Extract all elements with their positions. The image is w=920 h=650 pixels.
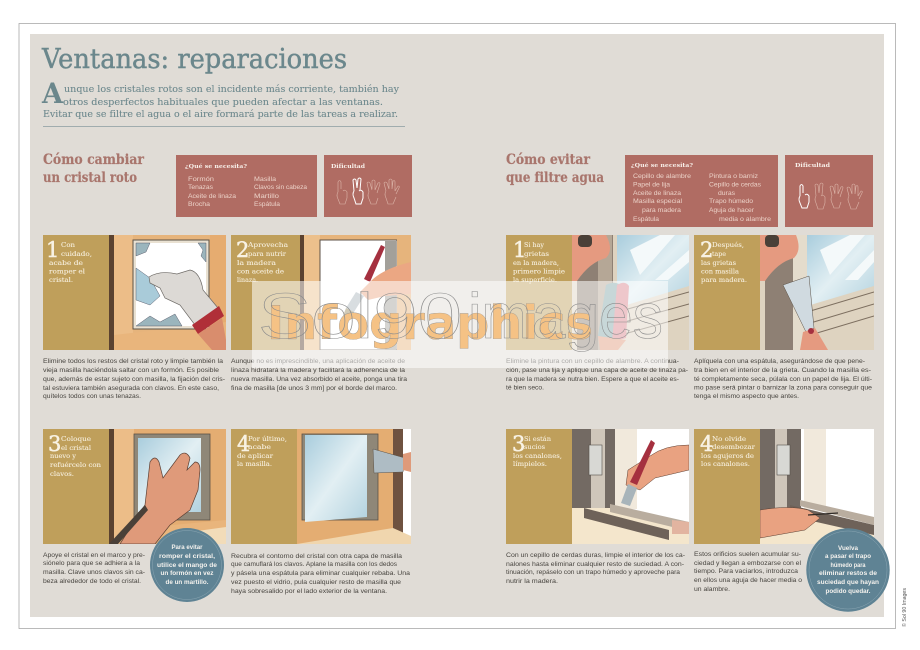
caption: Aplíquela con una espátula, asegurándose de que pene-: [694, 358, 865, 365]
panel: materials right: Papel de lija: [633, 182, 670, 188]
watermark: Sol90: [258, 280, 462, 352]
step text: Después,: [712, 241, 744, 249]
step text: la masilla.: [237, 460, 272, 468]
step tile: [231, 429, 297, 544]
illustration: brushing window channel: [572, 429, 689, 544]
caption: Elimine todos los restos del cristal roto y limpie también la: [43, 358, 223, 365]
caption: nalones hasta eliminar cualquier resto de suciedad. A con-: [506, 561, 684, 568]
watermark: [252, 280, 668, 368]
caption: haya sobresalido por el lado exterior de la ventana.: [231, 588, 387, 595]
heading: cómo cambiar un cristal roto: Cómo cambiar: [43, 152, 145, 168]
caption: [43, 358, 225, 400]
step text: [513, 435, 562, 468]
step number: 4: [237, 432, 250, 456]
step text: [50, 435, 102, 478]
caption: y pásela una espátula para eliminar cualquier rebaba. Una: [231, 570, 410, 577]
caption: Elimine la pintura con un cepillo de alambre. A continua-: [506, 358, 679, 365]
step text: No olvide: [712, 435, 746, 443]
caption: té bien seco.: [506, 384, 544, 392]
caption: nueva masilla. Una vez absorbido el aceite, ponga una tira: [231, 376, 407, 383]
panel: materials right: Cepillo de alambre: [633, 173, 691, 180]
caption: té completamente seca, púlala con un papel de lija. El últi-: [694, 376, 872, 383]
step text: el cristal: [61, 444, 91, 452]
panel: materials left: Martillo: [254, 193, 280, 200]
step number: 2: [700, 238, 713, 262]
step text: tape: [712, 250, 726, 258]
illustration: applying putty to window: [297, 429, 411, 544]
step text: los canalones,: [513, 452, 562, 460]
caption: [694, 551, 802, 593]
step text: nuevo y: [50, 452, 76, 460]
step: right 3: [506, 429, 689, 585]
callout: damp cloth: suciedad que hayan: [817, 579, 879, 586]
step text: clavos.: [50, 470, 74, 478]
panel: materials left: [176, 155, 317, 217]
illustration: wire brush on cracked wood: [572, 235, 689, 350]
step text: [237, 435, 287, 468]
step: left 1: [43, 235, 226, 400]
callout: damp cloth: podido quedar.: [826, 588, 871, 595]
panel: materials right: duras: [718, 190, 735, 197]
illustration: brushing oil on frame: [300, 235, 411, 350]
panel: materials right: Cepillo de cerdas: [709, 182, 761, 188]
caption: [231, 553, 410, 595]
icon: difficulty hands, level 1: [799, 183, 862, 209]
intro text block: unque los cristales rotos son el incidente más corriente, también hay: [64, 84, 400, 95]
caption: siónelo para que se adhiera a la: [43, 560, 140, 567]
caption: tiempo. Para vaciarlos, introduzca: [694, 568, 798, 575]
intro text block: [41, 77, 400, 120]
panel: materials right: Masilla especial: [633, 198, 682, 205]
step text: los agujeros de: [701, 452, 754, 460]
step text: acabe de: [49, 259, 83, 267]
caption: ción, pase una lija y aplique una capa de aceite de linaza pa-: [506, 367, 688, 374]
caption: tenga el mismo aspecto que antes.: [694, 393, 799, 400]
step tile: [506, 429, 572, 544]
step text: las grietas: [701, 259, 736, 267]
caption: en ellos una aguja de hacer media o: [694, 577, 802, 584]
panel: materials left: ¿Qué se necesita?: [185, 163, 248, 170]
illustration: hand pressing new glass: [109, 429, 226, 544]
step tile: [231, 235, 300, 350]
caption: nutrir la madera.: [506, 578, 558, 585]
panel: difficulty right: Dificultad: [795, 163, 830, 169]
icon: difficulty hands, level 2: [337, 178, 399, 204]
step text: [701, 241, 747, 284]
step text: desembozar: [712, 443, 756, 451]
caption: ciedad y llegan a embozarse con el: [694, 560, 802, 567]
panel: materials left: Formón: [188, 176, 215, 183]
caption: que, además de estar sujeto con masilla, la fijación del cris-: [43, 376, 225, 383]
step tile: [43, 429, 109, 544]
heading: cómo cambiar un cristal roto: un cristal roto: [43, 170, 137, 186]
panel: materials right: media o alambre: [719, 216, 771, 223]
step tile: [694, 429, 760, 544]
step text: acabe: [248, 443, 271, 451]
step text: Por último,: [248, 435, 287, 443]
step text: cuidado,: [61, 250, 92, 258]
caption: tra bien en el interior de la grieta. Cuando la masilla es-: [694, 367, 871, 374]
caption: [694, 358, 872, 400]
caption: tal estuviera también asegurada con clavos. En este caso,: [43, 385, 219, 392]
illustration: clearing channel holes with needle: [760, 429, 874, 544]
step text: grietas: [524, 250, 550, 258]
panel: difficulty right: [785, 155, 873, 227]
caption: vieja masilla haciéndola saltar con un formón. Es posible: [43, 367, 219, 374]
step: right 4: [694, 429, 874, 593]
intro text block: Evitar que se filtre el agua o el aire formará parte de las tareas a realizar.: [43, 109, 398, 120]
panel: materials left: Aceite de linaza: [188, 193, 236, 200]
step: right 1: [506, 235, 689, 392]
panel: materials right: Trapo húmedo: [709, 198, 753, 205]
panel: materials right: Aceite de linaza: [633, 190, 681, 197]
caption: masilla. Clave unos clavos sin ca-: [43, 569, 145, 576]
caption: un alambre.: [694, 586, 730, 593]
step text: Con: [61, 241, 76, 249]
panel: materials right: ¿Qué se necesita?: [631, 162, 694, 169]
title: Ventanas: reparaciones: [41, 44, 347, 75]
callout: damp cloth: eliminar restos de: [819, 570, 877, 577]
step text: refuércelo con: [50, 461, 102, 469]
callout: avoid breaking glass: de un martillo.: [166, 579, 209, 586]
panel: materials right: Pintura o barniz: [709, 173, 758, 180]
caption: quítelos todos con unas tenazas.: [43, 393, 141, 400]
panel: materials left: Masilla: [254, 176, 276, 183]
callout: damp cloth: húmedo para: [830, 562, 866, 569]
step tile: [43, 235, 109, 350]
caption: vez puesto el vidrio, pula cualquier resto de masilla que: [231, 579, 401, 586]
caption: [506, 358, 688, 392]
caption: mo pase será pintar o barnizar la zona para conseguir que: [694, 384, 872, 392]
callout: avoid breaking glass: [150, 528, 224, 602]
step number: 3: [48, 432, 61, 456]
step tile: [506, 235, 572, 350]
step number: 1: [513, 238, 526, 262]
illustration: gloved hand breaking glass: [109, 235, 226, 350]
caption: tinuación, repáselo con un trapo húmedo y aproveche para: [506, 569, 680, 576]
step text: [513, 241, 565, 284]
caption: Apoye el cristal en el marco y pre-: [43, 552, 145, 559]
caption: [43, 552, 145, 585]
step: left 2: [231, 235, 411, 392]
caption: Aunque no es imprescindible, una aplicación de aceite de: [231, 358, 405, 365]
step text: límpielos.: [513, 460, 547, 468]
intro text block: otros desperfectos habituales que pueden afectar a las ventanas.: [63, 97, 383, 108]
caption: Recubra el contorno del cristal con otra capa de masilla: [231, 553, 402, 560]
caption: Con un cepillo de cerdas duras, limpie el interior de los ca-: [506, 552, 685, 559]
step text: con masilla: [701, 268, 739, 276]
panel: difficulty left: Dificultad: [331, 164, 365, 170]
step text: la superficie.: [513, 276, 557, 284]
caption: fina de masilla [de unos 3 mm] por el borde del marco.: [231, 385, 397, 392]
step text: de aplicar: [237, 452, 274, 460]
heading: cómo evitar que filtre agua: [506, 152, 604, 186]
panel: materials left: Brocha: [188, 201, 210, 208]
step: left 3: [43, 429, 226, 585]
step text: Aprovecha: [247, 241, 288, 249]
step text: sucios: [524, 443, 545, 451]
step: right 2: [694, 235, 874, 400]
panel: materials left: Tenazas: [188, 184, 213, 191]
panel: materials right: Aguja de hacer: [709, 207, 755, 214]
step text: para nutrir: [248, 250, 287, 258]
panel: materials right: [625, 155, 778, 227]
step: left 4: [231, 429, 411, 595]
step text: cristal.: [49, 276, 73, 284]
illustration: filling cracks with spatula: [760, 235, 874, 350]
callout: damp cloth: Vuelva: [838, 545, 858, 552]
step number: 1: [46, 238, 59, 262]
step text: romper el: [49, 268, 85, 276]
step text: linaza.: [237, 276, 258, 284]
caption: [231, 358, 407, 392]
caption: ra que la madera se nutra bien. Espere a que el aceite es-: [506, 376, 679, 383]
panel: materials left: Clavos sin cabeza: [254, 184, 307, 191]
credit: © Sol 90 Images: [901, 587, 908, 627]
step text: primero limpie: [513, 268, 565, 276]
step text: [701, 435, 756, 468]
caption: [506, 552, 685, 585]
step text: [237, 241, 288, 284]
caption: Estos orificios suelen acumular su-: [694, 551, 801, 558]
step tile: [694, 235, 760, 350]
panel: materials right: Espátula: [633, 216, 659, 223]
drop cap: A: [41, 77, 64, 110]
step text: en la madera,: [513, 259, 559, 267]
callout: avoid breaking glass: utilice el mango de: [157, 562, 217, 569]
watermark: images: [468, 280, 663, 352]
step text: Si están: [524, 435, 552, 443]
panel: materials left: Espátula: [254, 201, 280, 208]
callout: avoid breaking glass: Para evitar: [172, 544, 203, 551]
callout: damp cloth: a pasar el trapo: [825, 553, 871, 560]
heading: cómo evitar que filtre agua: Cómo evitar: [506, 152, 591, 168]
step text: [49, 241, 92, 284]
step text: Coloque: [61, 435, 91, 443]
watermark: Infographics: [267, 296, 593, 350]
heading: cómo evitar que filtre agua: que filtre agua: [506, 170, 604, 186]
caption: que camuflará los clavos. Aplane la masilla con los dedos: [231, 561, 398, 568]
step text: la madera: [237, 259, 276, 267]
step text: los canalones.: [701, 460, 750, 468]
step number: 4: [700, 432, 713, 456]
step number: 3: [512, 432, 525, 456]
step number: 2: [236, 238, 249, 262]
callout: avoid breaking glass: romper el cristal,: [159, 553, 215, 560]
callout: damp cloth: [806, 528, 890, 612]
callout: avoid breaking glass: un formón en vez: [160, 570, 214, 577]
panel: difficulty left: [324, 155, 412, 217]
panel: materials right: para madera: [642, 207, 681, 214]
step text: Si hay: [524, 241, 544, 249]
caption: linaza hidratará la madera y facilitará la adherencia de la: [231, 367, 405, 374]
heading: cómo cambiar un cristal roto: [43, 152, 145, 186]
caption: beza alrededor de todo el cristal.: [43, 578, 141, 585]
step text: con aceite de: [237, 268, 284, 276]
step text: para madera.: [701, 276, 747, 284]
